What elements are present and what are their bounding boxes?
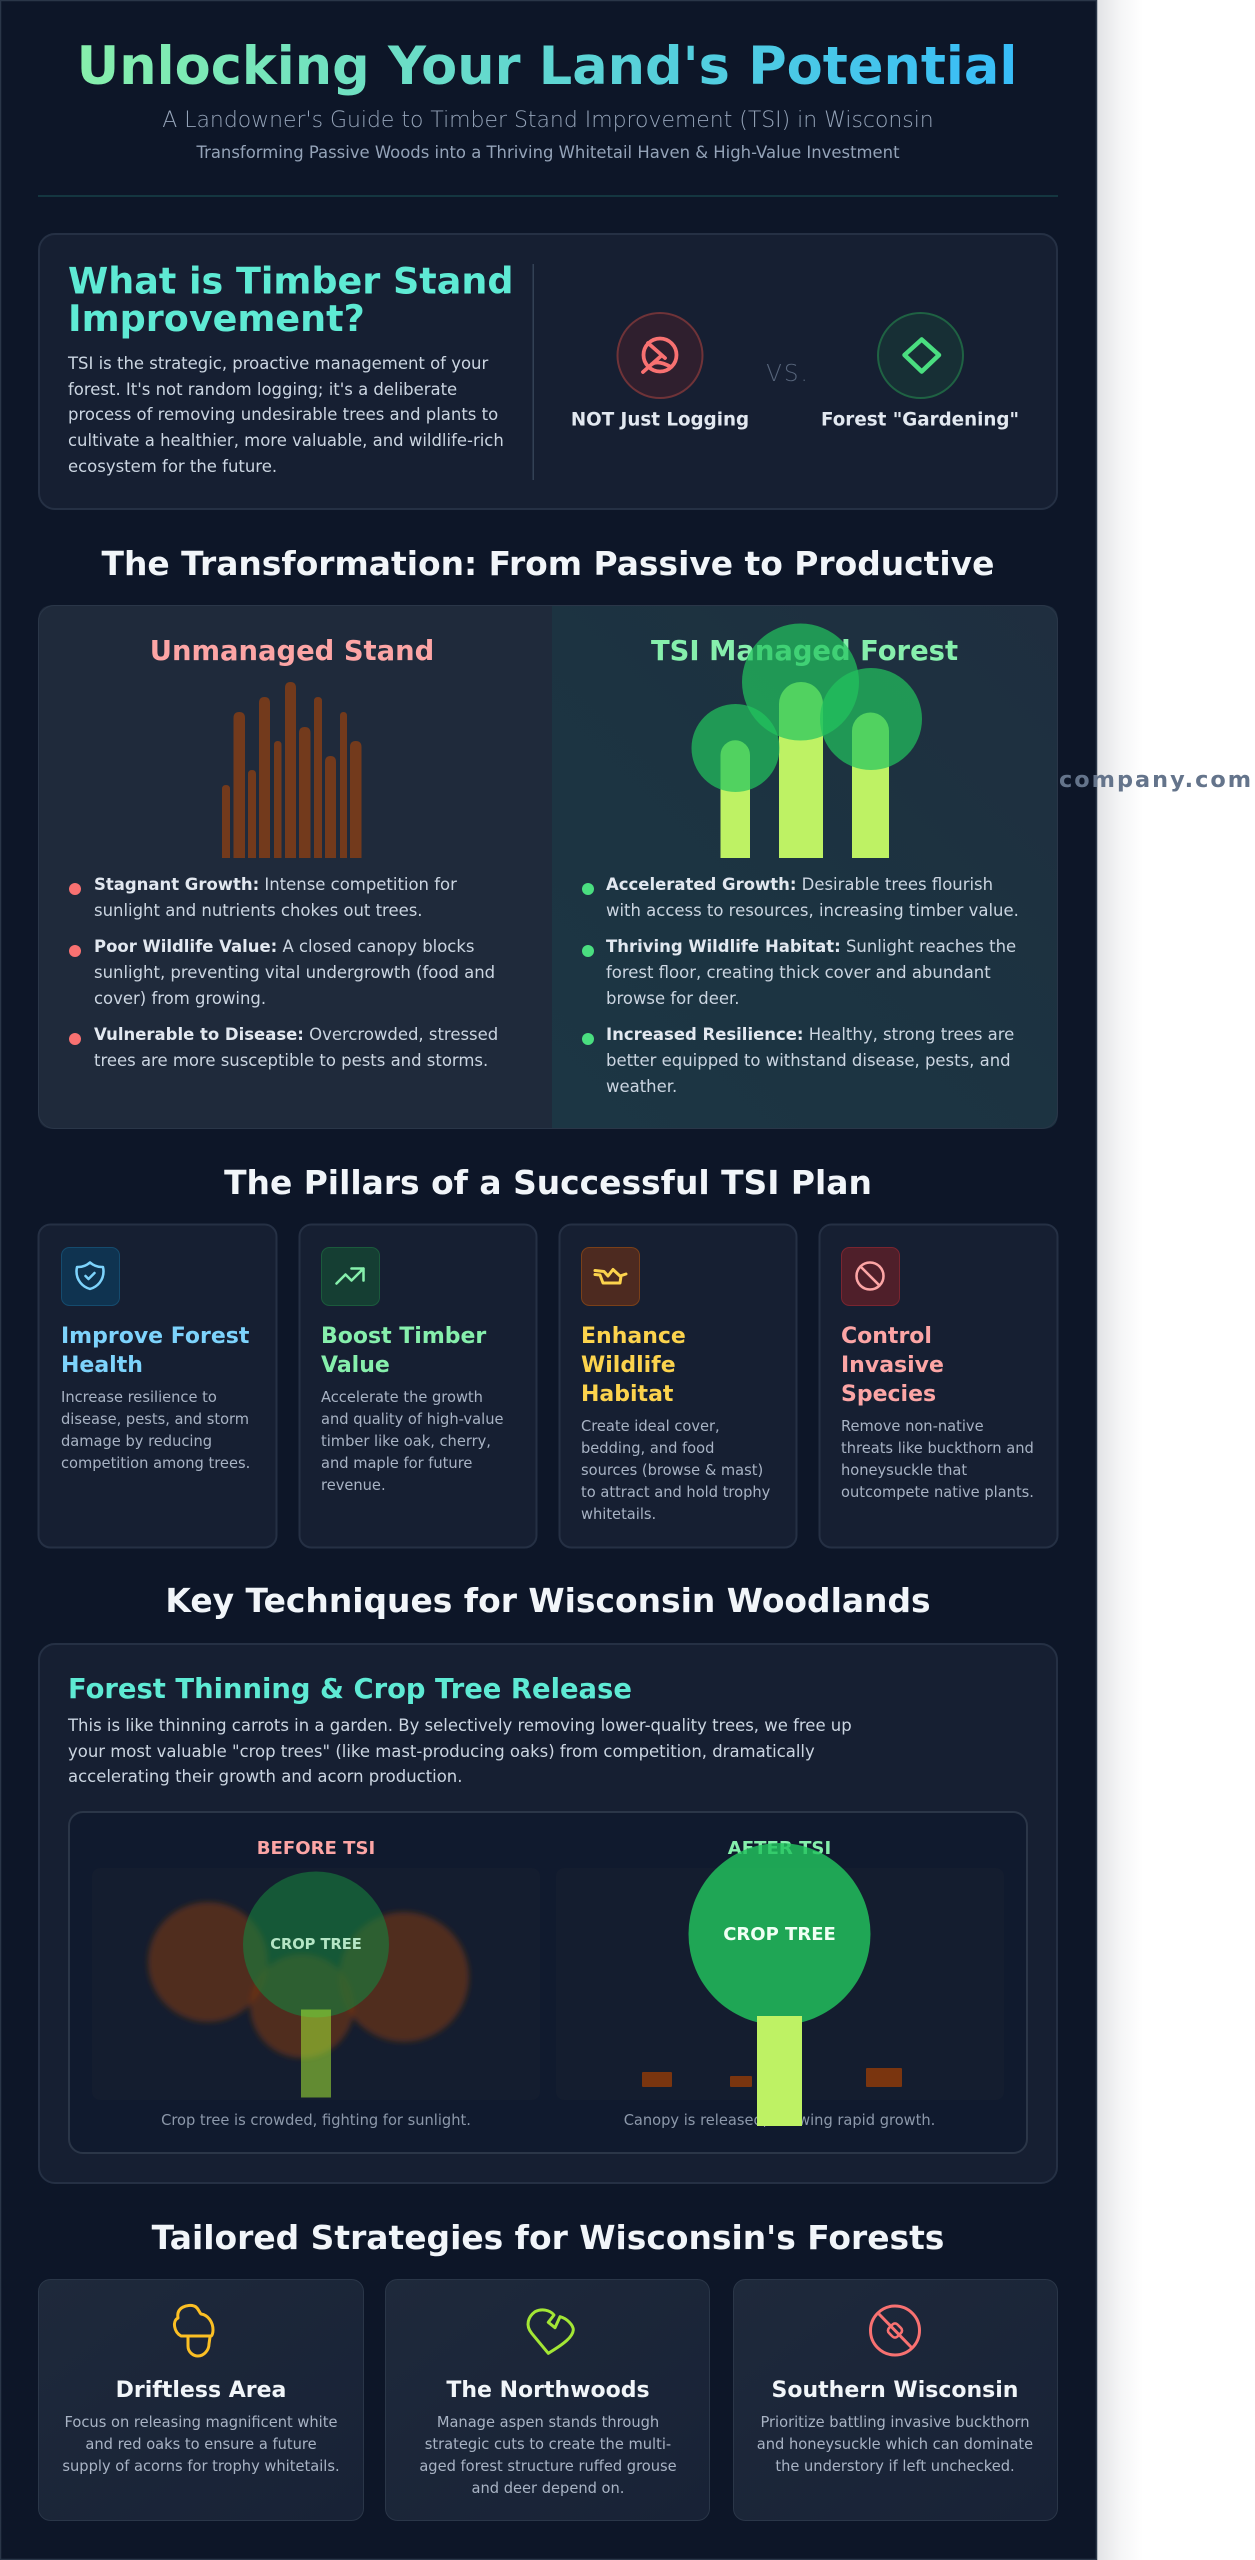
- heading: what is TSI: Improvement?: [68, 297, 365, 340]
- body: timber like oak, cherry,: [321, 1433, 491, 1450]
- list: unmanaged problems: sunlight and nutrients chokes out trees.: [94, 901, 423, 920]
- heading: Value: [321, 1353, 390, 1378]
- panel: forest thinning: [39, 1644, 1057, 2183]
- list: unmanaged problems: [69, 875, 498, 1070]
- heading: Driftless Area: [116, 2378, 286, 2403]
- body: Manage aspen stands through: [437, 2414, 659, 2431]
- body: [419, 2414, 677, 2497]
- crop tree: [243, 1872, 389, 2098]
- body: outcompete native plants.: [841, 1484, 1034, 1501]
- heading: tailored strategies: Tailored Strategies for Wisconsin's Forests: [152, 2218, 944, 2257]
- panel: regional strategies: [38, 2280, 1058, 2520]
- body: Create ideal cover,: [581, 1418, 720, 1435]
- body: supply of acorns for trophy whitetails.: [62, 2458, 340, 2475]
- list: managed benefits: better equipped to withstand disease, pests, and: [606, 1051, 1011, 1070]
- list: unmanaged problems: sunlight, preventing vital undergrowth (food and: [94, 963, 495, 982]
- list: managed benefits: Accelerated Growth: Desirable trees flourish: [606, 875, 993, 894]
- vs: VS.: [766, 361, 810, 387]
- released crop tree: CROP TREE: [723, 1924, 836, 1945]
- region: northwoods: [386, 2280, 710, 2520]
- list: managed benefits: forest floor, creating thick cover and abundant: [606, 963, 991, 982]
- released crop tree: [688, 1843, 870, 2126]
- description: [67, 1716, 852, 1786]
- panel: TSI managed forest: [552, 605, 1058, 1129]
- crop tree: CROP TREE: [270, 1936, 362, 1953]
- definition text: process of removing undesirable trees and plants to: [68, 405, 498, 424]
- body: sources (browse & mast): [581, 1462, 763, 1479]
- icon: leaf: [528, 2310, 573, 2353]
- list: managed benefits: Increased Resilience: Healthy, strong trees are: [606, 1025, 1014, 1044]
- body: disease, pests, and storm: [61, 1411, 249, 1428]
- body: [841, 1418, 1034, 1501]
- diagram: before and after: [69, 1812, 1027, 2153]
- before TSI: [92, 1838, 540, 2129]
- label: forest gardening: Forest "Gardening": [821, 410, 1019, 430]
- icon: not just logging: [618, 313, 702, 398]
- list: unmanaged problems: trees are more susceptible to pests and storms.: [94, 1051, 488, 1070]
- watermark: company.com: [1059, 767, 1253, 793]
- heading: Control: [841, 1324, 932, 1349]
- definition text: cultivate a healthier, more valuable, and wildlife-rich: [68, 431, 504, 450]
- heading: The Northwoods: [446, 2378, 650, 2403]
- body: strategic cuts to create the multi-: [425, 2436, 671, 2453]
- body: competition among trees.: [61, 1455, 250, 1472]
- body: [321, 1389, 504, 1494]
- pillar: invasive species: [820, 1224, 1058, 1548]
- heading: Boost Timber: [321, 1324, 486, 1349]
- list: managed benefits: browse for deer.: [606, 989, 739, 1008]
- body: to attract and hold trophy: [581, 1484, 771, 1501]
- body: and red oaks to ensure a future: [85, 2436, 317, 2453]
- heading: Invasive: [841, 1353, 944, 1378]
- competing trees: [148, 1902, 469, 2058]
- body: Increase resilience to: [61, 1389, 217, 1406]
- subtitle: A Landowner's Guide to Timber Stand Improvement (TSI) in Wisconsin: [162, 108, 934, 133]
- icon: forest gardening: [878, 313, 963, 398]
- definition text: ecosystem for the future.: [68, 457, 277, 476]
- heading: Health: [61, 1353, 143, 1378]
- description: your most valuable "crop trees" (like mast-producing oaks) from competition, dramatically: [68, 1742, 815, 1761]
- panel: what is TSI: [39, 234, 1057, 509]
- list: managed benefits: weather.: [606, 1077, 677, 1096]
- list: unmanaged problems: Poor Wildlife Value: A closed canopy blocks: [94, 937, 474, 956]
- body: Remove non-native: [841, 1418, 984, 1435]
- list: unmanaged problems: Stagnant Growth: Intense competition for: [94, 875, 457, 894]
- heading: Species: [841, 1382, 936, 1407]
- body: [757, 2414, 1033, 2475]
- body: Accelerate the growth: [321, 1389, 483, 1406]
- list: managed benefits: [582, 875, 1019, 1096]
- description: This is like thinning carrots in a garden. By selectively removing lower-quality trees, we free up: [67, 1716, 852, 1735]
- title: Unlocking Your Land's Potential: [77, 36, 1017, 97]
- body: and deer depend on.: [472, 2480, 624, 2497]
- region: southern wisconsin: [734, 2280, 1058, 2520]
- heading: what is TSI: What is Timber Stand: [68, 260, 514, 302]
- list: managed benefits: Thriving Wildlife Habitat: Sunlight reaches the: [606, 937, 1016, 956]
- definition text: forest. It's not random logging; it's a deliberate: [68, 380, 457, 399]
- icon: trending up: [322, 1248, 380, 1306]
- heading: Wildlife: [581, 1353, 676, 1378]
- body: Prioritize battling invasive buckthorn: [760, 2414, 1030, 2431]
- icon: ban: [842, 1248, 900, 1306]
- body: and maple for future: [321, 1455, 472, 1472]
- body: and honeysuckle which can dominate: [757, 2436, 1033, 2453]
- icon: shield: [62, 1248, 120, 1306]
- list: managed benefits: with access to resources, increasing timber value.: [606, 901, 1019, 920]
- heading: pillars: The Pillars of a Successful TSI Plan: [224, 1163, 872, 1202]
- heading: key techniques: Key Techniques for Wisconsin Woodlands: [165, 1581, 931, 1620]
- body: bedding, and food: [581, 1440, 714, 1457]
- body: revenue.: [321, 1477, 386, 1494]
- label: after: AFTER TSI: [728, 1838, 831, 1859]
- panel: transformation comparison: [38, 605, 1058, 1129]
- heading: Southern Wisconsin: [772, 2378, 1018, 2403]
- heading: Improve Forest: [61, 1324, 250, 1349]
- header: [77, 36, 1017, 162]
- icon: acorn: [174, 2305, 213, 2356]
- body: honeysuckle that: [841, 1462, 967, 1479]
- heading: Habitat: [581, 1382, 674, 1407]
- body: [62, 2414, 340, 2475]
- pillar: forest health: [38, 1224, 276, 1548]
- heading: TSI managed forest: TSI Managed Forest: [651, 636, 958, 667]
- definition text: [67, 354, 504, 476]
- panel: pillars: [38, 1224, 1058, 1548]
- list: unmanaged problems: cover) from growing.: [94, 989, 266, 1008]
- heading: forest thinning: Forest Thinning & Crop Tree Release: [68, 1674, 632, 1705]
- description: accelerating their growth and acorn production.: [68, 1767, 462, 1786]
- pillar: wildlife habitat: [560, 1224, 796, 1548]
- label: before: BEFORE TSI: [257, 1838, 375, 1859]
- body: the understory if left unchecked.: [775, 2458, 1015, 2475]
- heading: Enhance: [581, 1324, 686, 1349]
- definition text: TSI is the strategic, proactive management of your: [67, 354, 488, 373]
- stumps: [642, 2068, 902, 2087]
- panel shadow: [1097, 0, 1143, 2560]
- pillar: timber value: [300, 1224, 536, 1548]
- icon: habitat: [582, 1248, 640, 1306]
- body: damage by reducing: [61, 1433, 212, 1450]
- region: driftless area: [38, 2280, 364, 2520]
- illustration: healthy trees: [692, 624, 922, 858]
- panel: unmanaged stand: [38, 605, 552, 1129]
- label: not just logging: NOT Just Logging: [571, 410, 749, 430]
- body: [61, 1389, 250, 1472]
- caption: before: Crop tree is crowded, fighting for sunlight.: [161, 2112, 471, 2129]
- body: Focus on releasing magnificent white: [65, 2414, 337, 2431]
- body: [581, 1418, 771, 1523]
- body: whitetails.: [581, 1506, 656, 1523]
- list: unmanaged problems: Vulnerable to Disease: Overcrowded, stressed: [94, 1025, 498, 1044]
- caption: after: Canopy is released, allowing rapid growth.: [624, 2112, 935, 2129]
- body: aged forest structure ruffed grouse: [419, 2458, 677, 2475]
- heading: the transformation: The Transformation: From Passive to Productive: [102, 544, 994, 583]
- body: threats like buckthorn and: [841, 1440, 1034, 1457]
- after TSI: [556, 1838, 1004, 2129]
- tagline: Transforming Passive Woods into a Thriving Whitetail Haven & High-Value Investment: [195, 143, 900, 162]
- illustration: crowded trunks: [222, 682, 362, 858]
- icon: no invasive: [870, 2306, 920, 2355]
- heading: unmanaged stand: Unmanaged Stand: [150, 636, 434, 667]
- body: and quality of high-value: [321, 1411, 504, 1428]
